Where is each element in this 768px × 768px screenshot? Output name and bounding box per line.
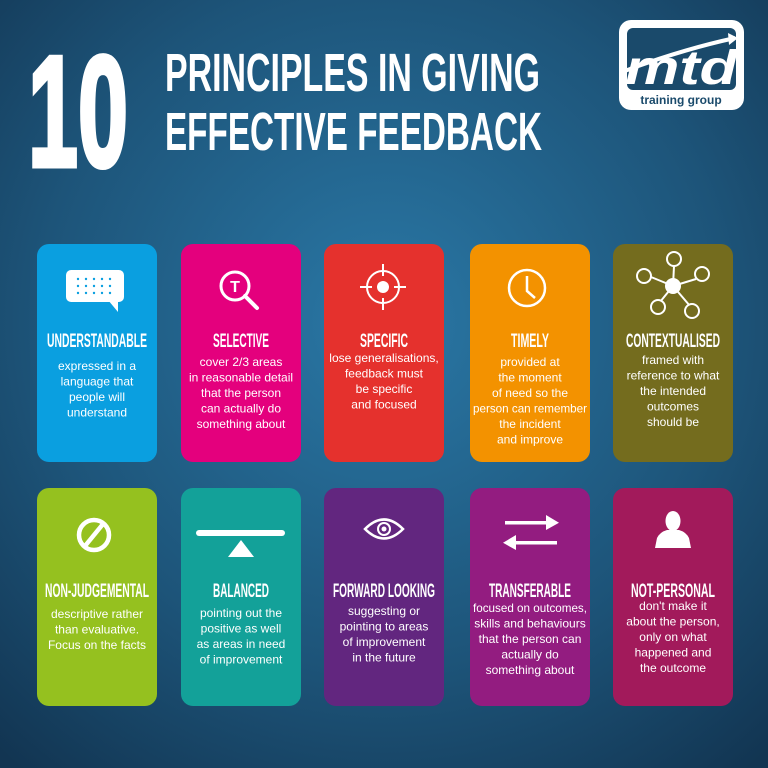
panel: specific: and focused	[351, 398, 417, 412]
panel: understandable: people will	[69, 390, 125, 404]
panel: transferable: actually do	[501, 648, 559, 662]
panel: understandable: expressed in a	[58, 359, 136, 373]
title text: PRINCIPLES IN GIVING	[165, 43, 540, 103]
panel: not-personal	[613, 488, 733, 706]
panel: non-judgemental: NON-JUDGEMENTAL	[45, 581, 149, 602]
icon: balance	[196, 530, 285, 557]
panel: selective: cover 2/3 areas	[200, 355, 282, 369]
icon: network	[637, 252, 709, 318]
panel: not-personal: the outcome	[640, 661, 706, 675]
panel: forward looking: pointing to areas	[340, 620, 428, 634]
icon: magnifier: T	[230, 279, 240, 296]
icon: target	[360, 264, 406, 310]
panel: timely: the incident	[499, 417, 561, 431]
icon: speech bubble	[66, 270, 124, 312]
panel: non-judgemental	[37, 488, 157, 706]
panel: specific: be specific	[356, 382, 412, 396]
panel: timely	[470, 244, 590, 462]
panel: contextualised: reference to what	[627, 368, 720, 382]
title text: EFFECTIVE FEEDBACK	[165, 102, 542, 162]
panel: contextualised: should be	[647, 415, 699, 429]
panel: forward looking: of improvement	[343, 635, 426, 649]
panel: timely: TIMELY	[511, 331, 549, 352]
panel: timely: the moment	[498, 370, 562, 384]
panel: timely: and improve	[497, 432, 563, 446]
panel: selective: SELECTIVE	[213, 331, 269, 352]
panel: selective: something about	[197, 417, 286, 431]
panel: transferable	[470, 488, 590, 706]
panel: non-judgemental: than evaluative.	[55, 622, 139, 636]
panel: balanced: BALANCED	[213, 581, 269, 602]
icon: clock	[509, 270, 545, 306]
panel: transferable: skills and behaviours	[474, 616, 586, 630]
panel: forward looking: suggesting or	[348, 604, 420, 618]
panel: selective	[181, 244, 301, 462]
panel: specific: feedback must	[345, 366, 424, 380]
panel: non-judgemental: Focus on the facts	[48, 638, 146, 652]
panel: specific	[324, 244, 444, 462]
panel: not-personal: only on what	[639, 630, 707, 644]
icon: magnifier	[221, 272, 257, 308]
panel: contextualised: framed with	[642, 353, 704, 367]
panel: not-personal: happened and	[635, 646, 711, 660]
panel: understandable: understand	[67, 406, 127, 420]
panel: non-judgemental: descriptive rather	[51, 607, 143, 621]
panel: balanced: of improvement	[200, 652, 283, 666]
panel: specific: SPECIFIC	[360, 331, 408, 352]
panel: balanced	[181, 488, 301, 706]
panel: forward looking	[324, 488, 444, 706]
panel: contextualised	[613, 244, 733, 462]
title number 10: 10	[28, 24, 128, 200]
panel: not-personal: about the person,	[626, 614, 720, 628]
panel: timely: of need so the	[492, 386, 568, 400]
panel: specific: lose generalisations,	[329, 351, 439, 365]
panel: transferable: that the person can	[479, 632, 581, 646]
panel: forward looking: FORWARD LOOKING	[333, 581, 435, 602]
panel: understandable	[37, 244, 157, 462]
logo: mtd training group: training group	[640, 93, 722, 107]
logo: mtd training group	[619, 20, 744, 110]
panel: selective: that the person	[201, 386, 281, 400]
panel: understandable: language that	[61, 374, 134, 388]
panel: forward looking: in the future	[352, 650, 416, 664]
icon: prohibited	[79, 520, 109, 550]
title text	[165, 43, 542, 162]
panel: balanced: pointing out the	[200, 606, 282, 620]
icon: person	[655, 511, 691, 548]
icon: eye	[365, 520, 403, 538]
panel: not-personal: don't make it	[639, 599, 707, 613]
panel: transferable: focused on outcomes,	[473, 601, 587, 615]
panel: balanced: as areas in need	[197, 637, 285, 651]
panel: contextualised: the intended	[640, 384, 706, 398]
panel: transferable: TRANSFERABLE	[489, 581, 571, 602]
panel: selective: in reasonable detail	[189, 370, 293, 384]
panel: selective: can actually do	[201, 402, 281, 416]
panel: timely: person can remember	[473, 402, 587, 416]
logo: mtd training group: mtd	[625, 42, 739, 95]
panel: transferable: something about	[486, 663, 575, 677]
icon: arrows	[503, 515, 559, 550]
panel: balanced: positive as well	[201, 622, 281, 636]
panel: timely: provided at	[500, 355, 560, 369]
panel: contextualised: outcomes	[647, 400, 699, 414]
panel: understandable: UNDERSTANDABLE	[47, 331, 147, 352]
